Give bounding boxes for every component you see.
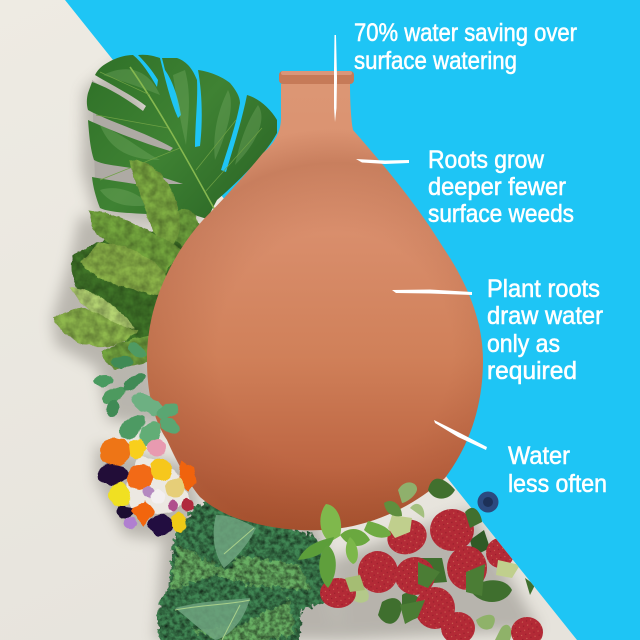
lettuce bottom leaf <box>53 308 138 347</box>
chalk line: roots <box>356 159 409 164</box>
text: roots grow: Roots grow <box>428 146 545 174</box>
plant shadows on paper <box>52 60 540 640</box>
icon: terracotta olla pot <box>147 71 483 530</box>
text: water less often <box>508 442 607 498</box>
chalk line: water <box>434 420 487 450</box>
icon: romaine lettuce <box>53 160 204 369</box>
strawberry greens <box>346 530 535 640</box>
kale rib leaves <box>175 515 256 640</box>
text: plant roots <box>487 275 603 385</box>
text: water less often: Water <box>508 442 570 470</box>
text: water saving: 70% water saving over <box>354 19 577 47</box>
icon: edible flowers <box>97 437 196 535</box>
lettuce dark back leaves <box>71 225 200 345</box>
pot rim <box>279 71 354 84</box>
text: plant roots: required <box>487 357 577 385</box>
text: roots grow <box>428 146 574 228</box>
strawberry leaves over pot <box>384 479 482 528</box>
text: plant roots: Plant roots <box>487 275 600 303</box>
strawberry calyxes <box>345 515 520 624</box>
lettuce small leaf <box>174 209 204 252</box>
lettuce middle leaf <box>80 242 168 296</box>
text: roots grow: deeper fewer <box>428 173 566 201</box>
text: plant roots: only as <box>487 330 560 358</box>
icon: monstera leaf <box>87 55 277 219</box>
lettuce lower leaf <box>102 335 150 369</box>
strawberries <box>320 509 543 640</box>
text: water less often: less often <box>508 470 607 498</box>
text: plant roots: draw water <box>487 302 603 330</box>
icon: basil <box>298 504 391 588</box>
icon: kale <box>157 502 330 640</box>
text: roots grow: surface weeds <box>428 200 574 228</box>
lettuce big leaf <box>89 210 182 274</box>
lettuce light leaf <box>70 287 134 328</box>
lettuce top leaf <box>130 160 179 245</box>
text: water saving: surface watering <box>354 47 517 75</box>
strawberry fruits <box>320 509 543 640</box>
icon: mint sprigs <box>94 339 183 451</box>
chalk line: top <box>334 35 337 122</box>
flowers white filler <box>128 455 190 515</box>
icon: blueberry <box>478 492 498 512</box>
gray shadow behind monstera slits <box>92 80 190 200</box>
chalk line: plant roots <box>392 290 472 295</box>
text: water saving <box>354 19 577 75</box>
